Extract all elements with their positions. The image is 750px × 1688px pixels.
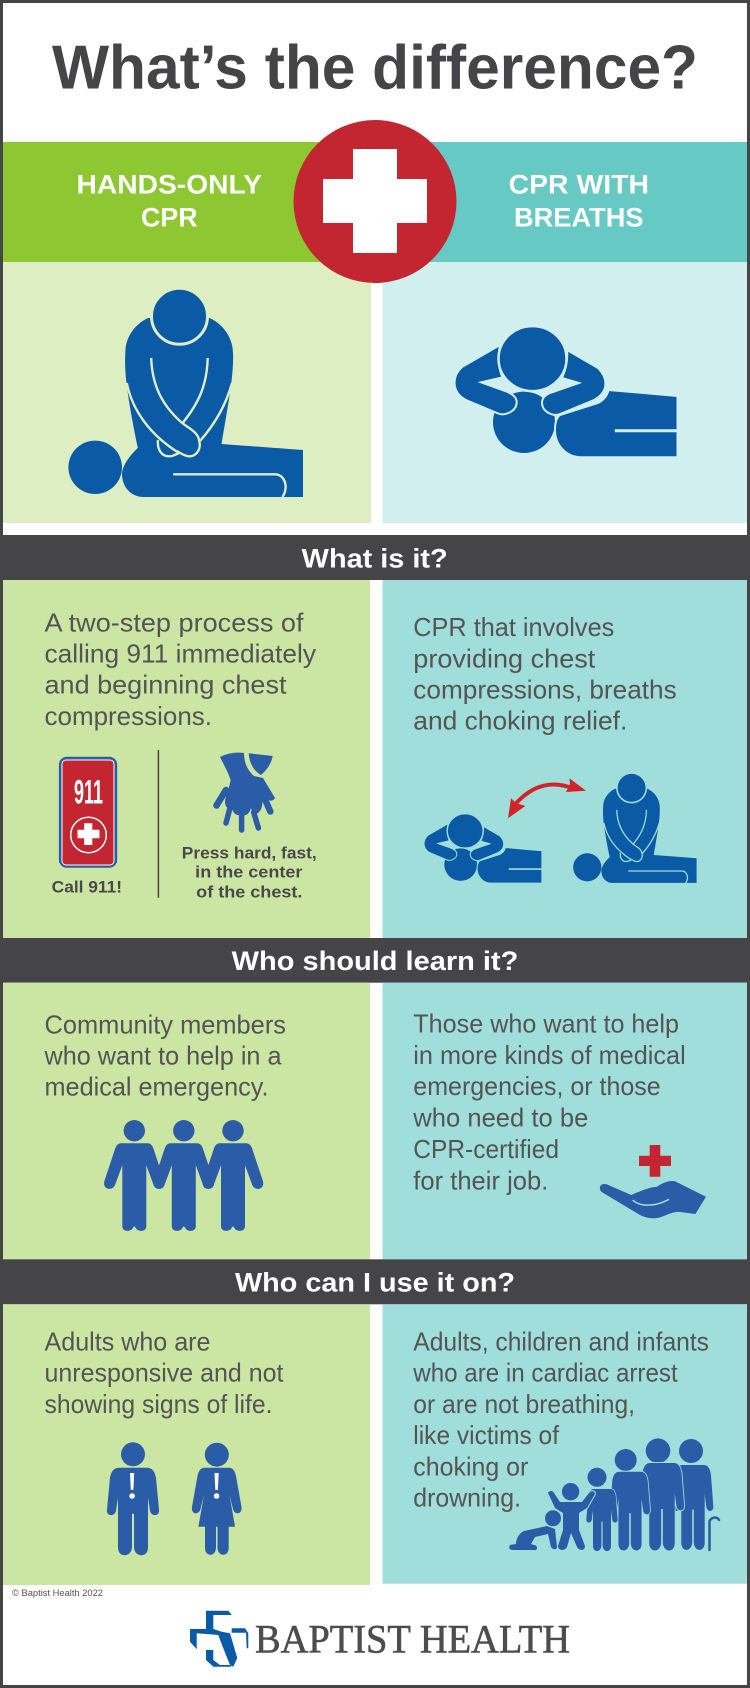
text block: audience: who want to help in a xyxy=(44,1040,282,1070)
section bar: who should learn it xyxy=(0,938,750,983)
section bar: who can I use it on xyxy=(0,1259,750,1304)
icon: small compressions figure xyxy=(573,773,697,883)
icon: rescue breaths figure xyxy=(455,326,678,457)
text block: audience: Those who want to help xyxy=(413,1009,679,1039)
caption: press hard: of the chest. xyxy=(196,883,302,902)
text block: definition: A two-step process of xyxy=(44,608,304,638)
icon: hands-only CPR figure xyxy=(68,288,303,497)
label: call 911: Call 911! xyxy=(52,878,122,897)
panel: who should learn, with breaths xyxy=(382,983,747,1259)
section bar: what is it xyxy=(0,535,750,580)
icon: three people holding hands xyxy=(104,1120,263,1231)
icon: red medical cross badge xyxy=(294,120,456,283)
panel: CPR with breaths illustration xyxy=(382,262,747,523)
text block: audience: CPR-certified xyxy=(413,1134,559,1164)
caption: press hard xyxy=(182,843,317,902)
icon: small breaths figure xyxy=(424,814,542,883)
text block: who xyxy=(412,1327,709,1513)
divider between steps xyxy=(157,750,159,898)
panel: what is it, hands-only xyxy=(3,580,370,938)
text block: audience: Community members xyxy=(44,1009,286,1039)
text block: who: drowning. xyxy=(413,1483,521,1513)
heading: hands-only: HANDS-ONLY xyxy=(76,169,262,199)
heading: CPR: CPR xyxy=(141,203,198,233)
caption: press hard: in the center xyxy=(195,863,303,882)
icon: man with exclamation mark xyxy=(107,1442,159,1555)
text block: definition: calling 911 immediately xyxy=(44,638,316,668)
panel: who should learn, hands-only xyxy=(3,983,370,1259)
caption: press hard: Press hard, fast, xyxy=(182,843,317,862)
text block: audience: emergencies, or those xyxy=(413,1071,661,1101)
text block: audience: for their job. xyxy=(413,1165,548,1195)
text block: who: unresponsive and not xyxy=(44,1358,284,1388)
text block: who: choking or xyxy=(413,1451,529,1481)
icon: family of all ages xyxy=(509,1438,719,1551)
text block: who: or are not breathing, xyxy=(413,1389,635,1419)
text block: definition: CPR that involves xyxy=(413,612,614,642)
text block: audience: who need to be xyxy=(412,1103,588,1133)
header: CPR with breaths xyxy=(375,142,747,262)
icon: phone with 911 xyxy=(59,757,117,868)
panel: who can I use it on, with breaths xyxy=(382,1304,747,1584)
arrow: alternate between steps xyxy=(508,778,586,818)
text block: audience: medical emergency. xyxy=(44,1072,268,1102)
section bar: who can I use it on: Who can I use it on? xyxy=(235,1267,515,1297)
text block: definition: compressions. xyxy=(44,701,212,731)
text block: audience: in more kinds of medical xyxy=(413,1040,686,1070)
panel: hands-only illustration xyxy=(3,262,371,523)
text block: who: Adults who are xyxy=(44,1327,210,1357)
heading: breaths: BREATHS xyxy=(514,203,644,233)
text block: definition: and choking relief. xyxy=(413,705,627,735)
text block: definition xyxy=(44,608,316,731)
icon: hands pressing xyxy=(216,753,275,830)
text block: who: showing signs of life. xyxy=(44,1389,272,1419)
panel: what is it, with breaths xyxy=(382,580,747,938)
section bar: what is it: What is it? xyxy=(302,543,448,573)
text block: who xyxy=(44,1327,284,1419)
heading: CPR with: CPR WITH xyxy=(509,169,649,199)
copyright: © Baptist Health 2022 xyxy=(12,1588,103,1599)
panel: who can I use it on, hands-only xyxy=(3,1304,370,1585)
icon: cross with Florida shape xyxy=(190,1611,248,1667)
text block: definition: and beginning chest xyxy=(44,669,287,699)
wordmark: BAPTIST HEALTH xyxy=(255,1616,570,1661)
text block: definition xyxy=(413,612,677,735)
icon: hand holding red cross xyxy=(600,1145,706,1218)
header: hands-only CPR xyxy=(3,142,375,262)
title: What’s the difference? xyxy=(52,33,698,102)
text block: audience xyxy=(412,1009,686,1195)
text block: who: Adults, children and infants xyxy=(413,1327,709,1357)
text block: who: who are in cardiac arrest xyxy=(412,1358,678,1388)
logo: Baptist Health xyxy=(190,1611,570,1667)
text block: who: like victims of xyxy=(413,1420,560,1450)
section bar: who should learn it: Who should learn it? xyxy=(232,946,518,976)
text block: definition: compressions, breaths xyxy=(413,674,677,704)
icon: woman with exclamation mark xyxy=(192,1443,242,1555)
text block: audience xyxy=(44,1009,286,1102)
icon: phone with 911: 911 xyxy=(74,773,103,811)
text block: definition: providing chest xyxy=(413,643,596,673)
